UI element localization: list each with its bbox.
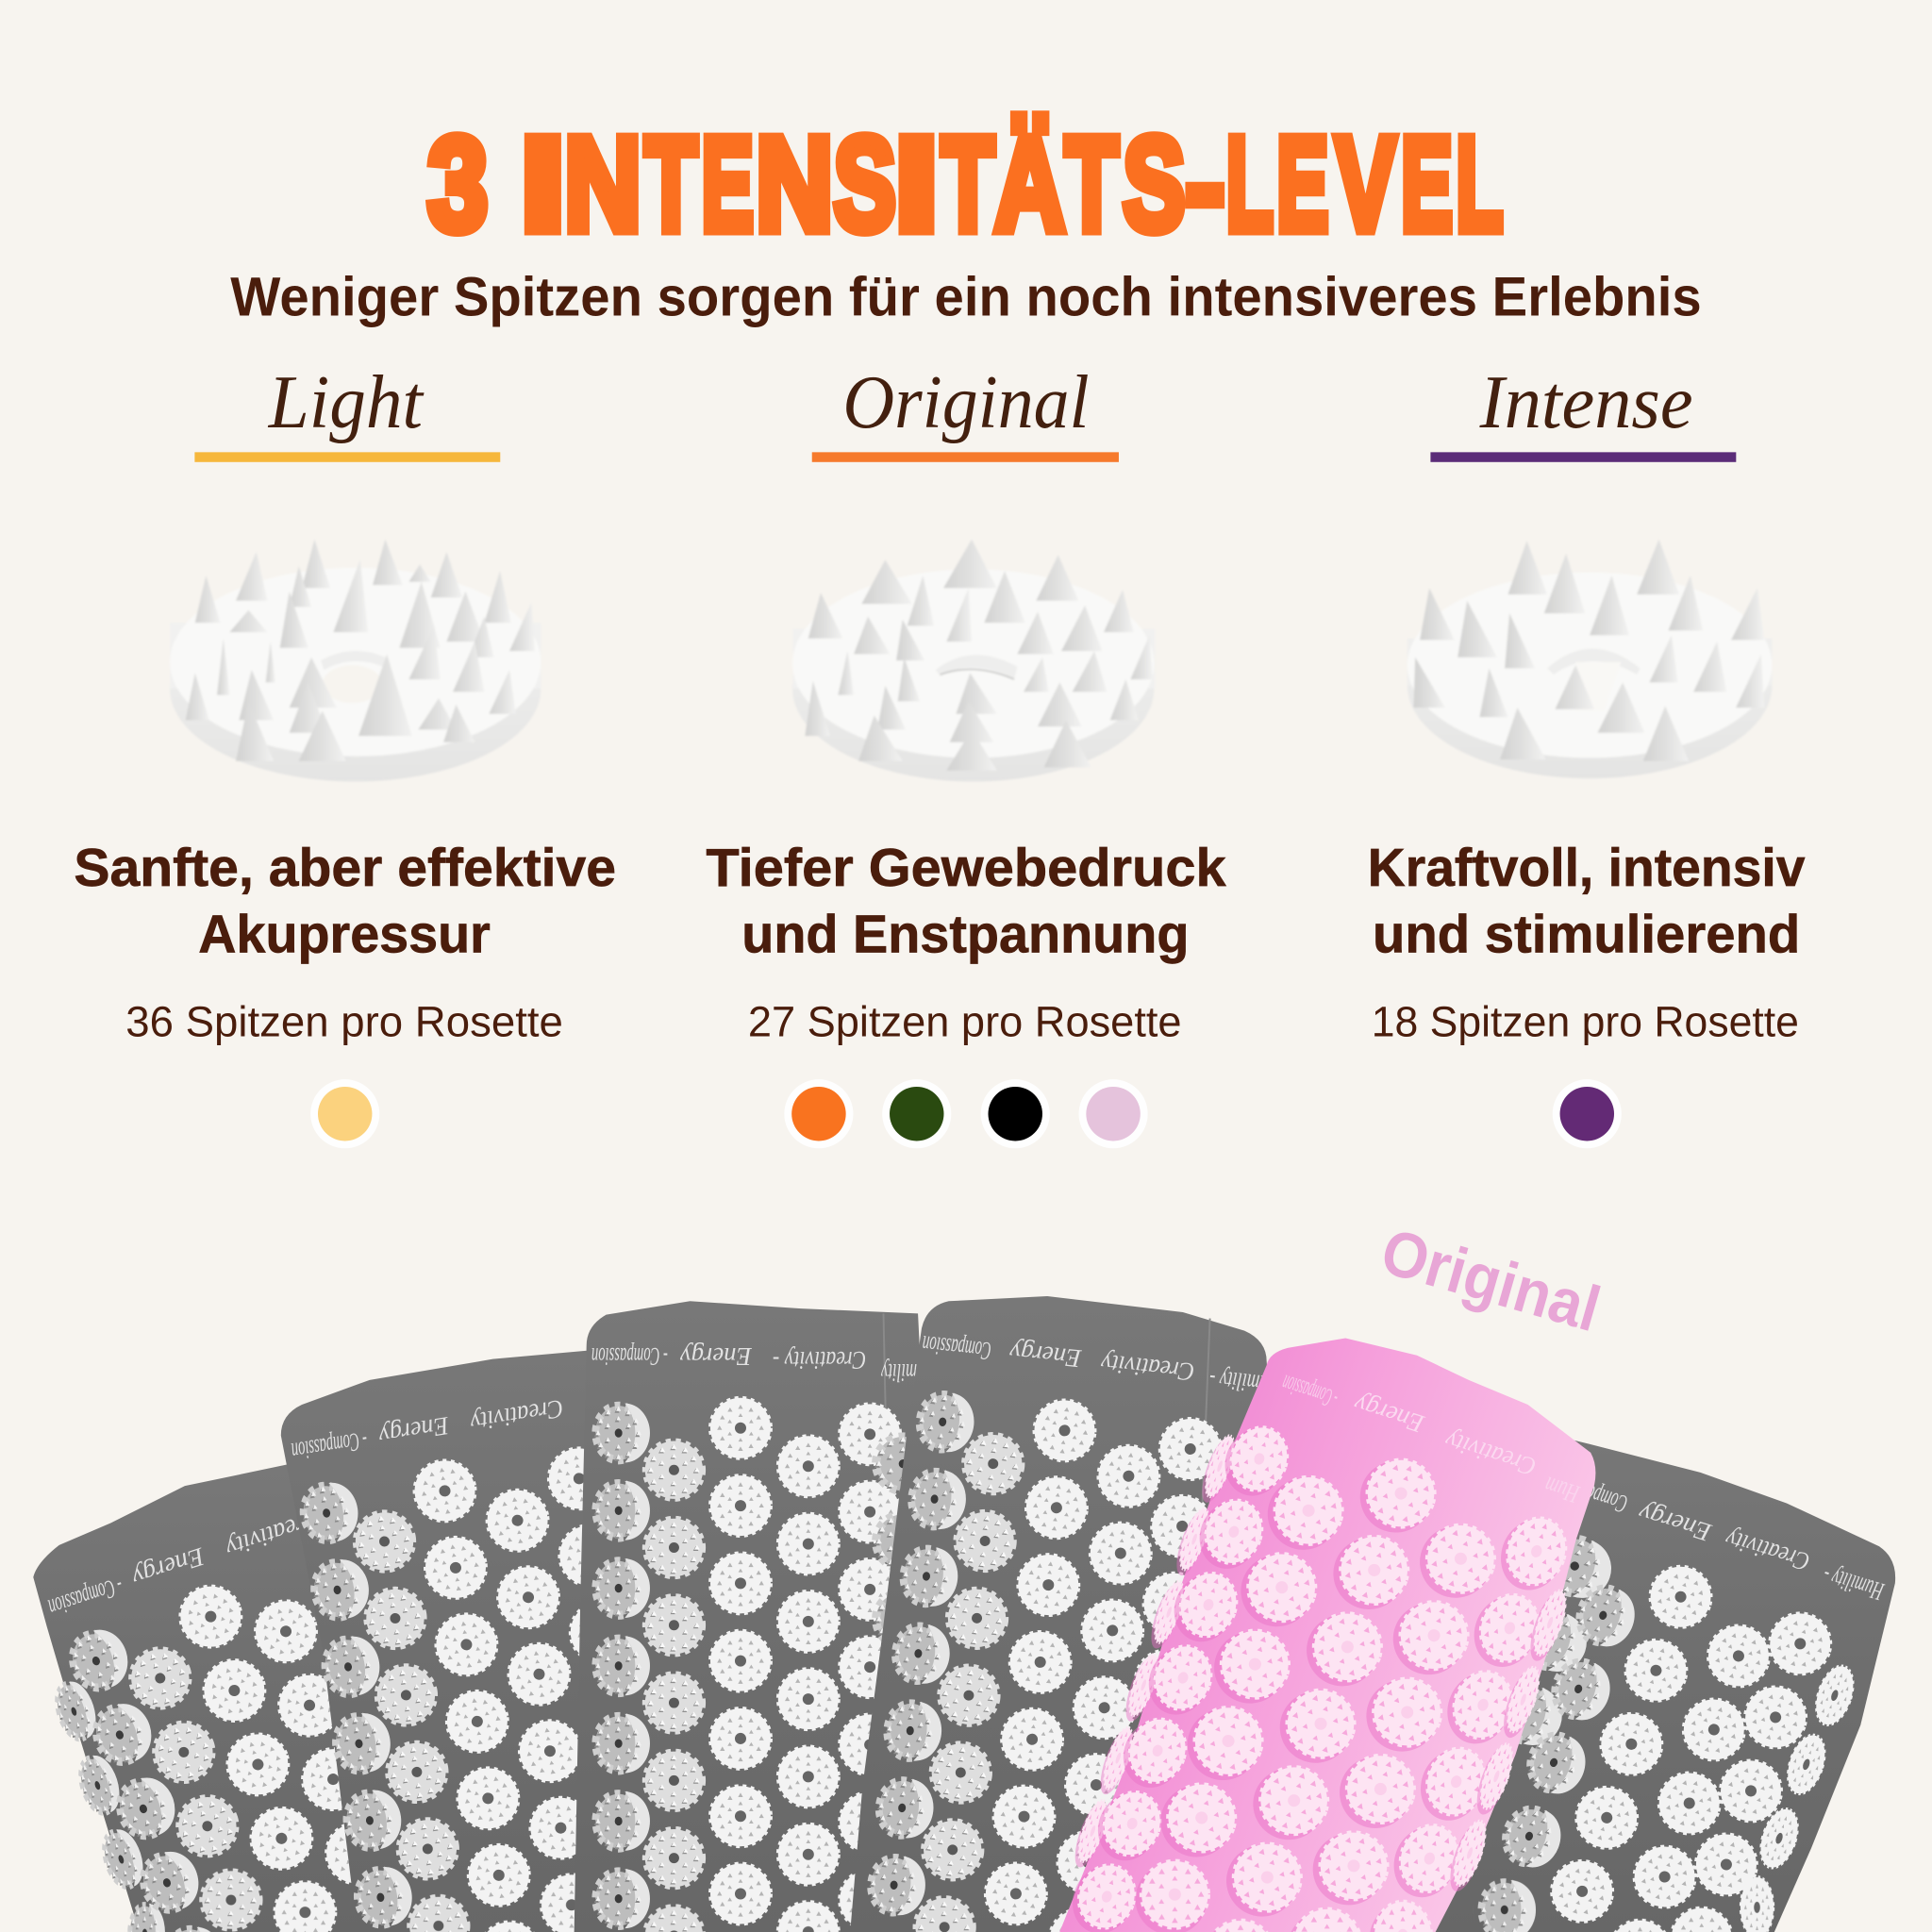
column: Original (706, 359, 1226, 1148)
icon: rosette with 18 spikes (1407, 540, 1772, 778)
underline: Original (812, 452, 1119, 462)
level name: Intense: Intense (1479, 359, 1693, 444)
mat 6: far right grey (1356, 1417, 1895, 1932)
benefit heading: Original: und Enstpannung (741, 905, 1189, 964)
title: Ä (994, 109, 1065, 258)
title: E (1276, 109, 1328, 258)
mat 1: far left grey (33, 1464, 407, 1932)
mat 2: second grey: - Compassion (290, 1426, 370, 1466)
mat 6: far right grey: Creativity (1722, 1524, 1813, 1576)
title: - (1186, 109, 1224, 258)
colour swatch: Intense (1553, 1079, 1622, 1148)
mat 2: second grey (281, 1349, 690, 1932)
benefit heading: Light: Akupressur (198, 905, 491, 964)
mat 5: highlighted pink Original mat: Creativity (1441, 1425, 1540, 1482)
spike count: Light: 36 Spitzen pro Rosette (125, 997, 563, 1045)
mat 2: second grey: Creativity (468, 1394, 565, 1437)
title: L (1456, 109, 1503, 258)
column: Intense (1368, 359, 1805, 1148)
mat 3: centre-left grey: - Compassion (591, 1342, 668, 1371)
mat 4: centre-right grey: Compassion (921, 1330, 992, 1366)
title: N (756, 109, 833, 258)
icon: rosette with 27 spikes (792, 540, 1155, 781)
benefit heading: Intense (1368, 838, 1805, 964)
title: 3 (428, 109, 488, 258)
subtitle: Weniger Spitzen sorgen für ein noch intensiveres Erlebnis (230, 266, 1702, 327)
callout: Original label: Original (1374, 1216, 1607, 1345)
benefit heading: Light (74, 838, 616, 964)
mat 6: far right grey: Energy (1635, 1498, 1715, 1547)
mat 5: highlighted pink Original mat (1059, 1338, 1595, 1932)
spike count: Intense: 18 Spitzen pro Rosette (1372, 997, 1799, 1045)
spike count: Original: 27 Spitzen pro Rosette (748, 997, 1182, 1045)
title: T (644, 109, 697, 258)
underline: Light (194, 452, 500, 462)
mat 3: centre-left grey: Creativity - (773, 1346, 866, 1374)
title: S (834, 109, 896, 258)
mat 4: centre-right grey: Humility - (1208, 1364, 1283, 1400)
mat 3: centre-left grey: Humility (880, 1358, 937, 1387)
benefit heading: Original (706, 838, 1226, 964)
title: L (1226, 109, 1274, 258)
title: E (1401, 109, 1453, 258)
mat 5: highlighted pink Original mat: Energy (1350, 1390, 1428, 1439)
title: T (941, 109, 994, 258)
title: I (520, 109, 565, 258)
benefit heading: Intense: und stimulierend (1373, 905, 1800, 964)
underline: Intense (1430, 452, 1736, 462)
mat 1: far left grey: Energy (128, 1541, 208, 1592)
column: Light (74, 359, 616, 1148)
title: N (564, 109, 641, 258)
title: I (894, 109, 939, 258)
mat 5: highlighted pink Original mat: - Compassion (1278, 1370, 1341, 1414)
level name: Original: Original (842, 359, 1090, 444)
mat 6: far right grey: Humility - (1820, 1561, 1888, 1607)
mat 1: far left grey: Creativity (222, 1506, 325, 1563)
mat 4: centre-right grey: Energy (1008, 1338, 1083, 1373)
mat 5: highlighted pink Original mat: Hum (1541, 1471, 1583, 1509)
product photo: fan of acupressure mats (33, 1296, 1895, 1932)
mat 3: centre-left grey: Energy (679, 1342, 753, 1371)
colour swatches: Original (784, 1079, 1148, 1148)
mat 6: far right grey: Compassion (1554, 1471, 1630, 1519)
benefit heading: Light: Sanfte, aber effektive (74, 838, 616, 897)
benefit heading: Original: Tiefer Gewebedruck (706, 838, 1226, 897)
mat 4: centre-right grey: Creativity (1099, 1348, 1196, 1387)
mat 4: centre-right grey (850, 1296, 1306, 1932)
title: V (1335, 109, 1395, 258)
icon: rosette with 36 spikes (170, 540, 541, 781)
level name: Light: Light (268, 359, 425, 444)
title: S (1123, 109, 1185, 258)
mat 2: second grey: Energy (376, 1411, 452, 1451)
mat 3: centre-left grey (575, 1301, 949, 1932)
benefit heading: Intense: Kraftvoll, intensiv (1368, 838, 1805, 897)
title: T (1065, 109, 1118, 258)
title: E (702, 109, 754, 258)
colour swatch: Light (310, 1079, 379, 1148)
